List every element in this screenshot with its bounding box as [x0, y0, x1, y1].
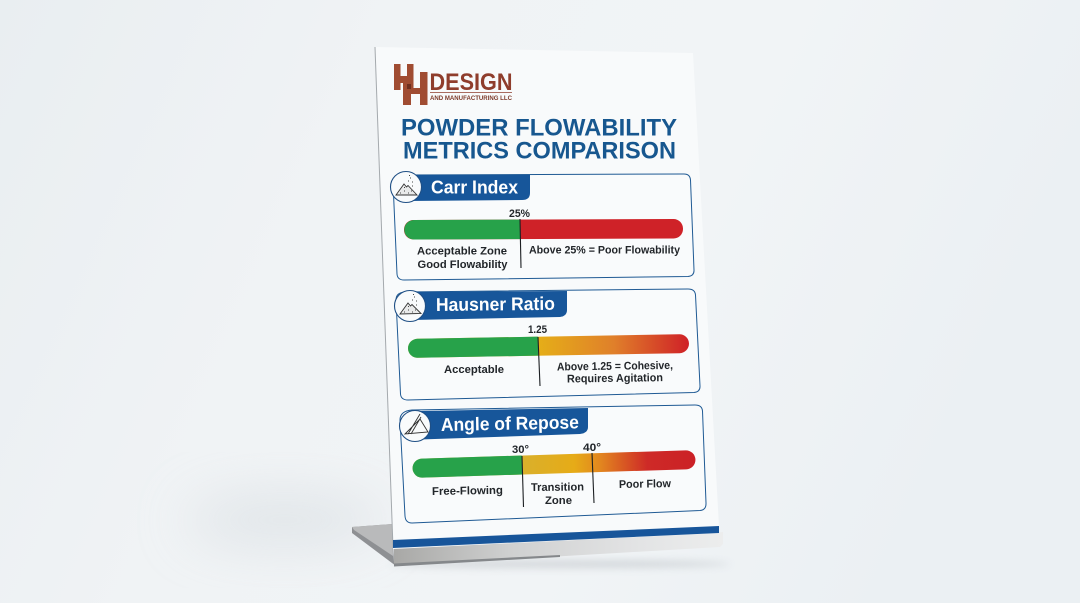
floor shadow — [185, 494, 730, 568]
label: cohesive: Above 1.25 = Cohesive, — [557, 360, 673, 373]
logo mark — [394, 64, 428, 105]
heading: Hausner Ratio — [436, 293, 555, 315]
label: transition zone: Transition — [531, 481, 584, 494]
panel: Carr Index — [390, 172, 694, 280]
bar — [408, 334, 689, 358]
label: free-flowing: Free-Flowing — [432, 485, 503, 498]
label: transition zone: Zone — [545, 495, 572, 507]
label: transition zone — [531, 481, 584, 507]
threshold label: 30 degrees: 30° — [512, 444, 529, 456]
logo — [394, 64, 512, 105]
bottom blue band — [393, 526, 719, 548]
dividers — [522, 453, 594, 507]
bar — [404, 219, 683, 239]
logo wordmark: DESIGN — [430, 69, 512, 96]
title: POWDER FLOWABILITY — [401, 114, 677, 142]
label: cohesive — [557, 360, 673, 385]
logo underline — [430, 92, 512, 94]
header tab — [412, 291, 567, 320]
label: poor flowability: Above 25% = Poor Flowability — [529, 244, 681, 256]
divider — [538, 337, 540, 386]
header tab — [420, 408, 588, 440]
card outline — [400, 405, 706, 523]
threshold label: 1.25 — [528, 324, 547, 336]
title: METRICS COMPARISON — [403, 138, 676, 164]
heading: Angle of Repose — [441, 411, 579, 435]
bar — [412, 450, 696, 478]
label: poor flow: Poor Flow — [619, 478, 671, 491]
card outline — [396, 289, 700, 400]
icon: powder pile — [394, 290, 426, 322]
heading: Carr Index — [431, 176, 519, 198]
icon: powder pile — [390, 172, 422, 202]
panel: Hausner Ratio — [394, 289, 700, 400]
label: cohesive: Requires Agitation — [567, 372, 663, 385]
panel: Angle of Repose — [400, 405, 706, 523]
label: acceptable: Acceptable — [444, 364, 504, 376]
title — [401, 114, 677, 164]
sign left edge — [375, 47, 393, 548]
label: acceptable zone: Acceptable Zone — [417, 246, 507, 258]
logo subtitle: AND MANUFACTURING LLC — [430, 95, 512, 102]
threshold label: 40 degrees: 40° — [583, 442, 601, 454]
divider — [520, 219, 521, 268]
sign panel — [375, 47, 719, 549]
card outline — [393, 174, 694, 280]
metal stand — [352, 524, 723, 566]
label: acceptable zone: Good Flowability — [418, 259, 508, 271]
label: acceptable zone — [417, 246, 508, 271]
icon: angle of repose — [400, 410, 430, 442]
header tab — [408, 175, 530, 201]
threshold label: 25% — [509, 208, 530, 220]
